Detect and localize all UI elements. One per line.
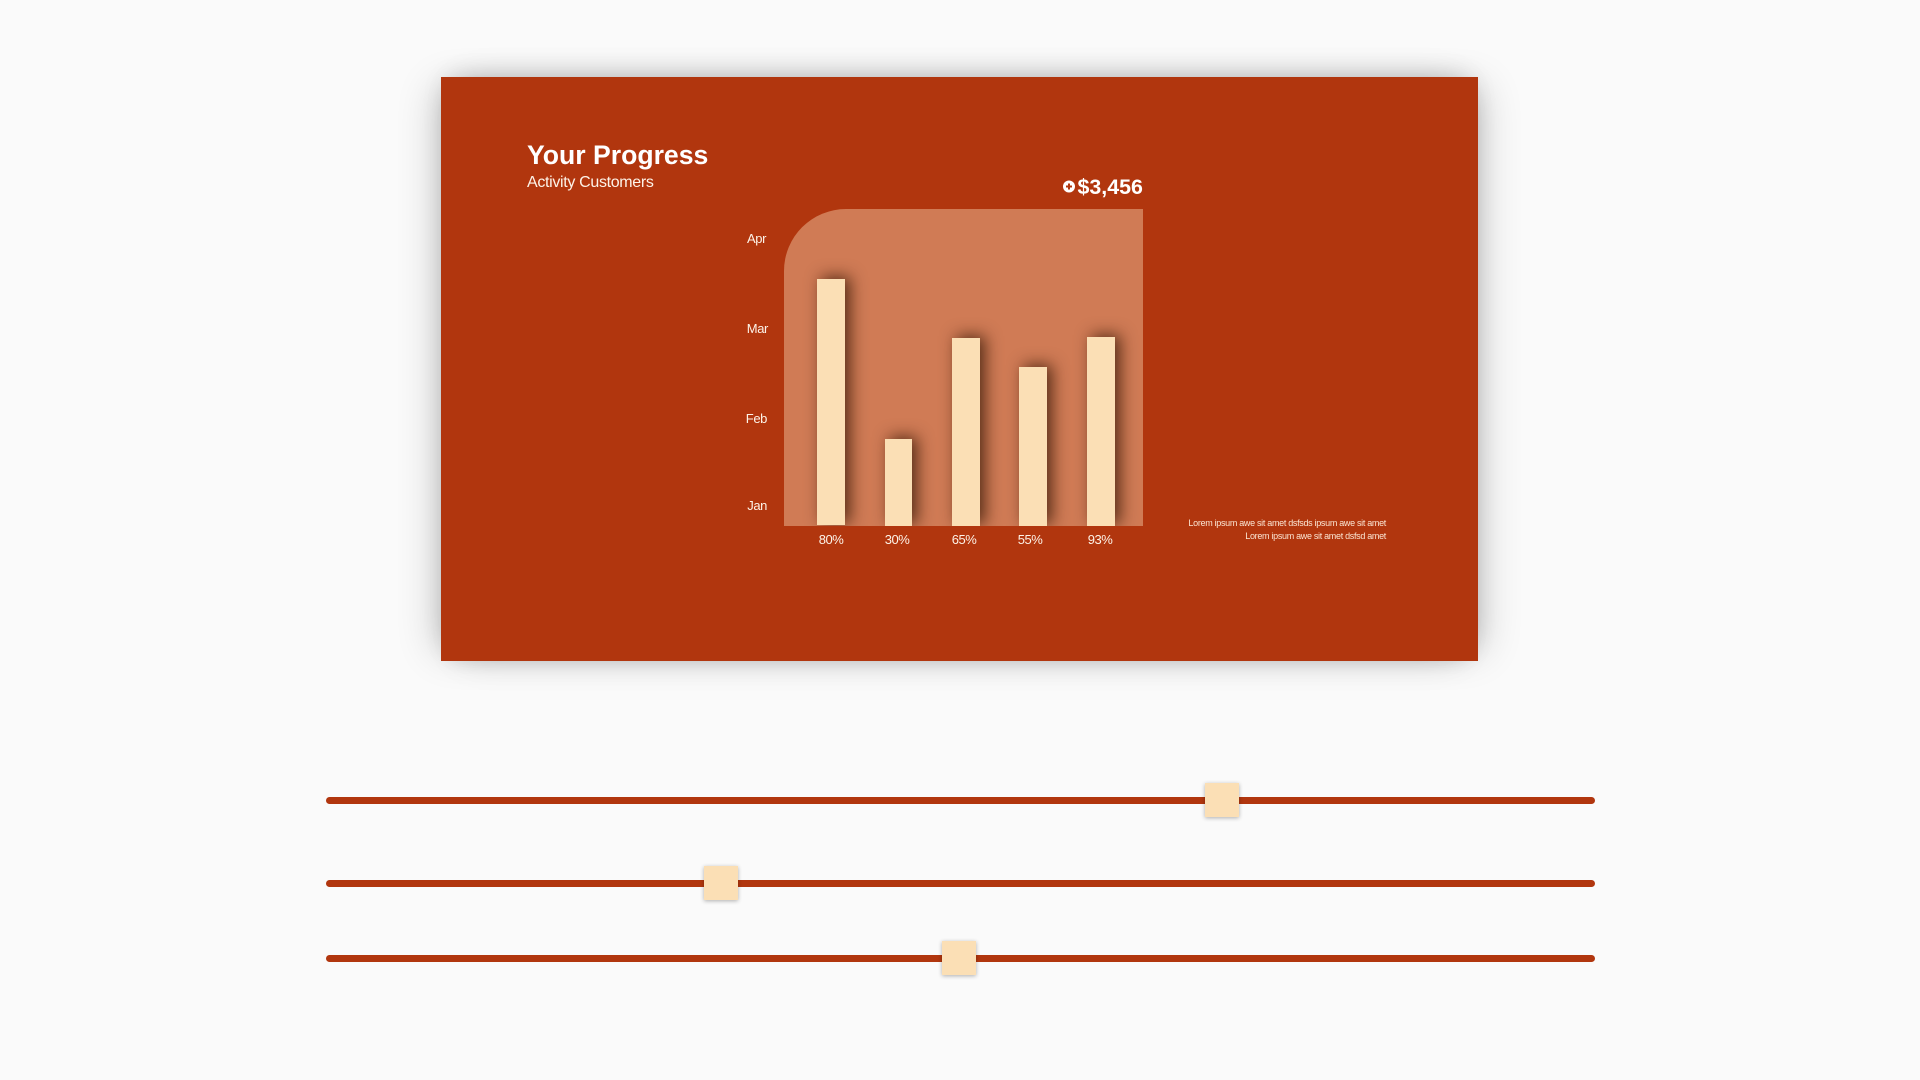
label: 80%: 80%: [819, 532, 843, 547]
label: Feb: Feb: [746, 410, 767, 426]
text block: lorem ipsum note: [1188, 518, 1386, 541]
slider handle: [704, 866, 738, 900]
label: 30%: 30%: [885, 532, 909, 547]
label: 65%: 65%: [952, 532, 976, 547]
text block: lorem ipsum note: Lorem ipsum awe sit amet dsfsds ipsum awe sit amet: [1188, 518, 1386, 528]
label: 93%: 93%: [1088, 532, 1112, 547]
bar chart: [784, 209, 1142, 526]
icon: plus circle: [1063, 180, 1075, 192]
slider handle: [1205, 783, 1239, 817]
panel: progress card: [441, 77, 1478, 661]
bar: 55%: [1019, 366, 1047, 526]
heading: Your Progress: Your Progress: [527, 140, 708, 170]
slider 1: [326, 782, 1595, 820]
label: Mar: Mar: [747, 321, 768, 336]
slider track: [326, 880, 1595, 887]
y axis labels: months: [746, 231, 768, 513]
text block: lorem ipsum note: Lorem ipsum awe sit amet dsfsd amet: [1245, 530, 1386, 540]
x axis labels: percentages: [819, 532, 1112, 547]
callout: total value with plus icon: [1063, 175, 1143, 199]
slider track: [326, 797, 1595, 804]
slider 2: [326, 864, 1595, 904]
label: Jan: Jan: [747, 498, 767, 513]
subtitle: Activity Customers: Activity Customers: [527, 174, 654, 191]
value: $3,456: $3,456: [1078, 175, 1143, 199]
bar: 80%: [817, 279, 845, 525]
label: 55%: 55%: [1018, 532, 1042, 547]
slider track: [326, 955, 1595, 962]
bar: 30%: [884, 439, 912, 526]
label: Apr: Apr: [747, 231, 766, 246]
bar: 93%: [1087, 337, 1114, 526]
slider handle: [942, 941, 976, 975]
slider 3: [326, 940, 1595, 978]
bar: 65%: [952, 338, 980, 526]
